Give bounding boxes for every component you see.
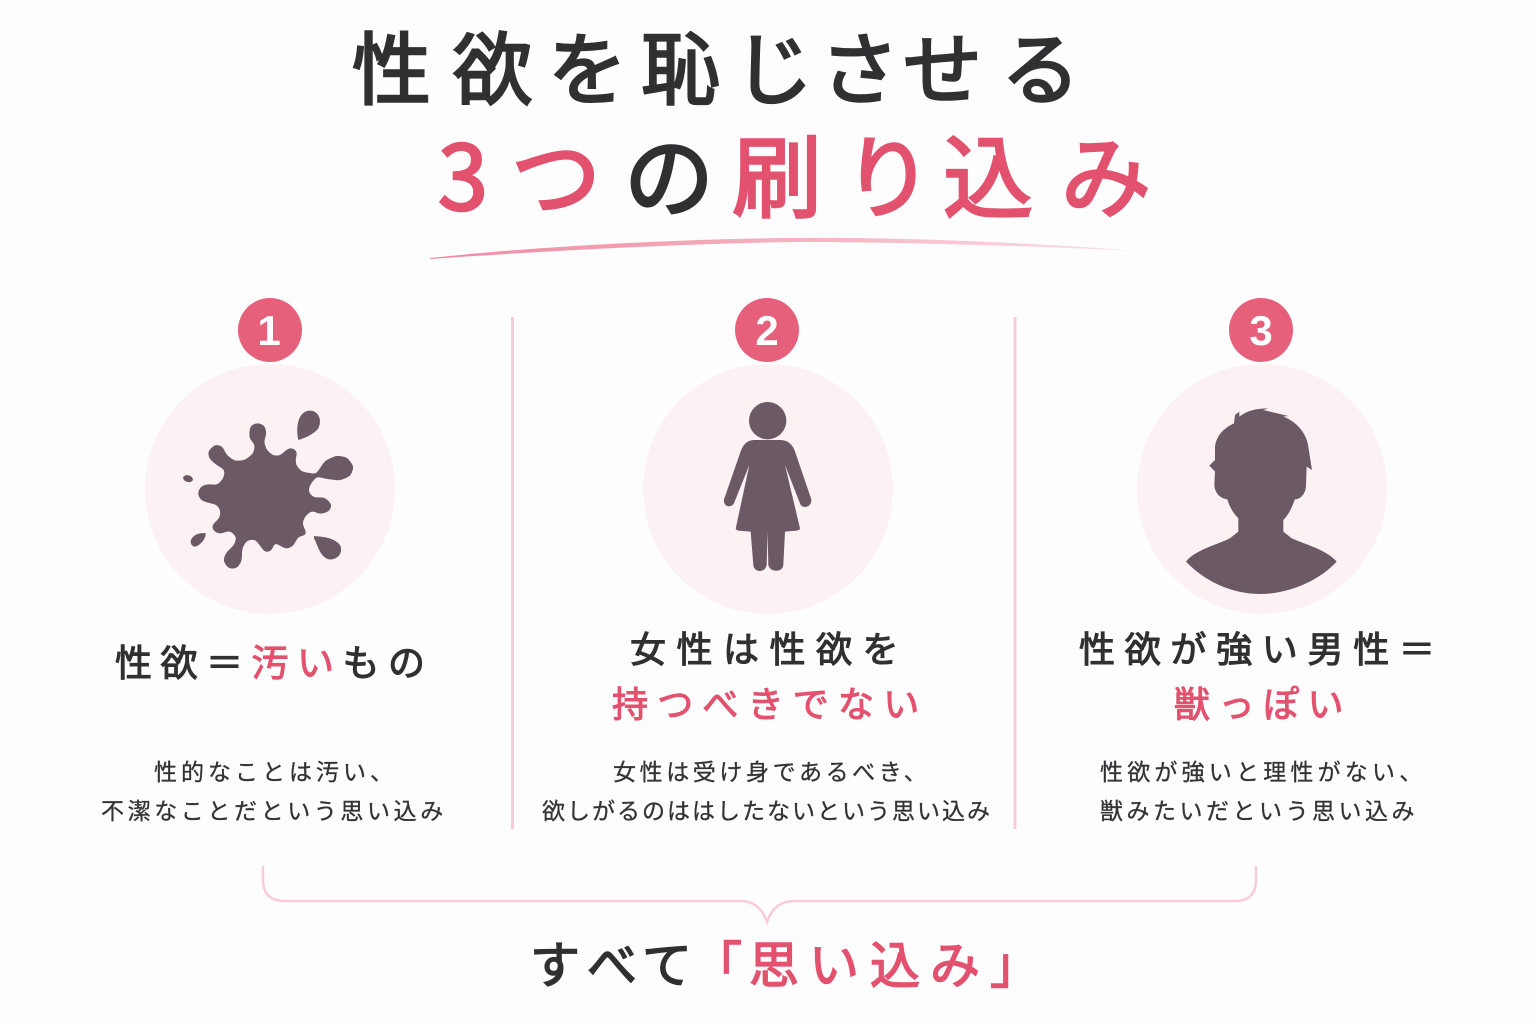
description 1 [101, 753, 447, 826]
conclusion: 「思い込み」 [692, 926, 1040, 998]
heading 3 [1079, 621, 1445, 728]
title line 1: 性欲を恥じさせる [352, 6, 1080, 121]
badge 2 [735, 298, 799, 362]
title line 2: 刷り込み [732, 106, 1151, 236]
panel: item 1 [101, 298, 447, 826]
panel: item 3 [1079, 298, 1445, 826]
icon circle 3 [1137, 364, 1387, 614]
title line 2: の [624, 106, 714, 236]
description 3: 獣みたいだという思い込み [1100, 792, 1418, 826]
badge 1 [238, 298, 302, 362]
icon circle 2 [643, 364, 893, 614]
title underline [430, 238, 1138, 259]
description 3: 性欲が強いと理性がない、 [1100, 753, 1426, 787]
column dividers [512, 317, 1015, 829]
icon: woman [724, 402, 811, 571]
icon circle 1 [145, 364, 395, 614]
description 1: 性的なことは汚い、 [154, 753, 397, 787]
description 2 [542, 753, 992, 826]
badge 2: 2 [755, 307, 779, 354]
description 3 [1100, 753, 1426, 826]
title line 2: 3つ [438, 106, 601, 236]
badge 3: 3 [1249, 307, 1273, 354]
description 1: 不潔なことだという思い込み [101, 792, 447, 826]
icon: splat [182, 411, 354, 569]
badge 1: 1 [257, 307, 281, 354]
heading 1: 性欲＝汚いもの [115, 633, 434, 687]
heading 3: 獣っぽい [1174, 676, 1352, 728]
heading 2: 持つべきでない [612, 676, 928, 728]
description 2: 欲しがるのははしたないという思い込み [542, 792, 992, 826]
heading 2: 女性は性欲を [630, 621, 909, 673]
heading 2 [612, 621, 928, 728]
badge 3 [1229, 298, 1293, 362]
bracket [263, 866, 1256, 922]
conclusion: すべて [530, 926, 692, 998]
icon: man silhouette [1186, 408, 1337, 594]
heading 3: 性欲が強い男性＝ [1079, 621, 1445, 673]
description 2: 女性は受け身であるべき、 [613, 753, 930, 787]
panel: item 2 [542, 298, 992, 826]
